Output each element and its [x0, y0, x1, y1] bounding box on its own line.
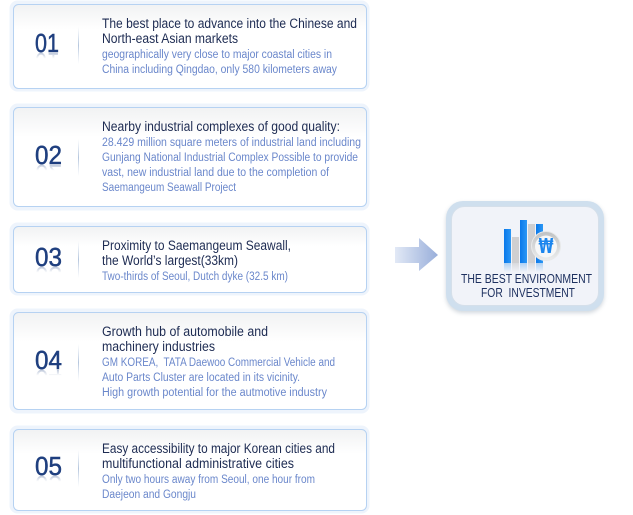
- number 04: [33, 345, 65, 396]
- text: card 02 description: Gunjang National Industrial Complex Possible to provide: [102, 152, 358, 164]
- number 01: 01: [35, 28, 59, 58]
- number 05: 05: [35, 470, 62, 500]
- heading: card 04: machinery industries: [102, 339, 215, 354]
- heading: card 03: Proximity to Saemangeum Seawall,: [102, 238, 291, 253]
- number 04: 04: [35, 364, 62, 394]
- text: card 02 description: vast, new industrial land due to the completion of: [102, 167, 330, 179]
- icon: bar chart with won coin: ₩: [538, 234, 554, 258]
- heading: card 05: [102, 441, 335, 471]
- number 04: 04: [35, 345, 62, 375]
- panel: card 05: [12, 428, 368, 512]
- number 01: 01: [35, 47, 59, 77]
- text: card 05 description: [102, 474, 315, 501]
- heading: card 05: multifunctional administrative cities: [102, 456, 294, 471]
- text: panel label: [461, 272, 592, 300]
- heading: card 03: [102, 238, 291, 268]
- heading: card 04: Growth hub of automobile and: [102, 324, 268, 339]
- arrow: [395, 238, 438, 271]
- number 02: 02: [35, 159, 62, 189]
- text: panel label: FOR INVESTMENT: [481, 286, 575, 300]
- text: card 02 description: Saemangeum Seawall Project: [102, 182, 237, 194]
- text: card 01 description: China including Qingdao, only 580 kilometers away: [102, 64, 337, 76]
- number 01: [33, 28, 63, 78]
- text: card 04 description: Auto Parts Cluster are located in its vicinity.: [102, 372, 300, 384]
- heading: card 02: Nearby industrial complexes of good quality:: [102, 119, 340, 134]
- text: card 04 description: [102, 357, 335, 399]
- number 03: 03: [35, 242, 62, 272]
- number 03: [33, 242, 65, 291]
- heading: card 05: Easy accessibility to major Korean cities and: [102, 441, 335, 456]
- text: card 02 description: [102, 137, 361, 194]
- text: card 01 description: [102, 49, 337, 76]
- number 02: [33, 140, 65, 190]
- text: panel label: THE BEST ENVIRONMENT: [461, 272, 592, 286]
- icon: bar chart with won coin: [504, 220, 560, 272]
- text: card 05 description: Only two hours away from Seoul, one hour from: [102, 474, 315, 486]
- panel: card 04: [12, 310, 368, 412]
- panel: card 02: [12, 106, 368, 208]
- number 02: 02: [35, 140, 62, 170]
- text: card 04 description: High growth potential for the autmotive industry: [102, 387, 327, 399]
- number 03: 03: [35, 261, 62, 291]
- heading: card 03: the World’s largest(33km): [102, 253, 238, 268]
- text: card 02 description: 28.429 million square meters of industrial land including: [102, 137, 361, 149]
- panel: card 01: [12, 2, 368, 90]
- heading: card 01: The best place to advance into the Chinese and: [102, 16, 357, 31]
- number 05: 05: [35, 451, 62, 481]
- heading: card 04: [102, 324, 268, 354]
- text: card 03 description: Two-thirds of Seoul, Dutch dyke (32.5 km): [102, 271, 288, 283]
- panel: the best environment for investment: [446, 201, 604, 313]
- text: card 01 description: geographically very close to major coastal cities in: [102, 49, 332, 61]
- heading: card 01: [102, 16, 357, 46]
- panel: card 03: [12, 224, 368, 294]
- number 05: [33, 451, 65, 502]
- text: card 04 description: GM KOREA, TATA Daewoo Commercial Vehicle and: [102, 357, 335, 369]
- text: card 05 description: Daejeon and Gongju: [102, 489, 196, 501]
- heading: card 01: North-east Asian markets: [102, 31, 238, 46]
